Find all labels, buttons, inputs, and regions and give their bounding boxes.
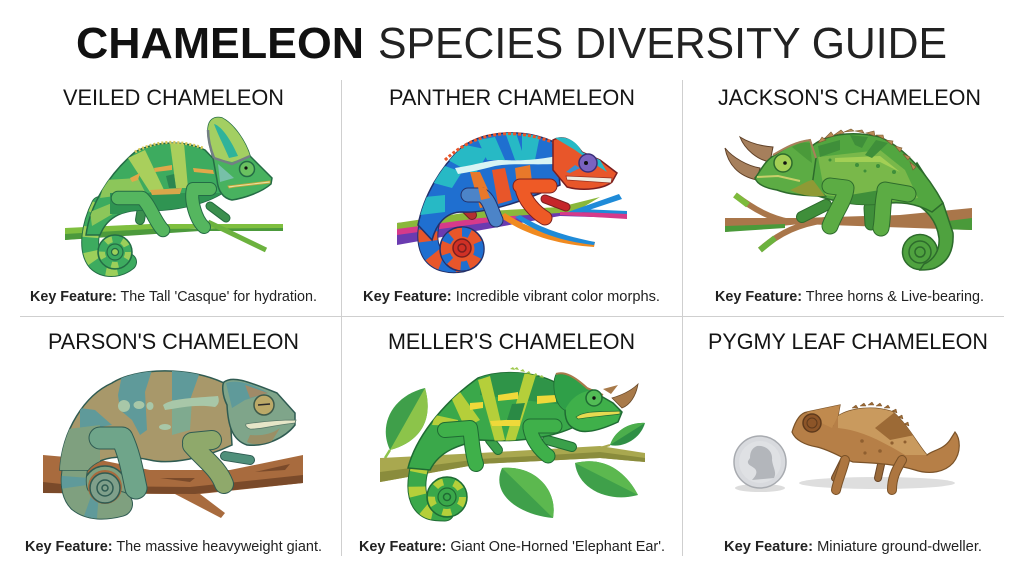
title: SPECIES DIVERSITY GUIDE	[378, 19, 947, 68]
title: CHAMELEON	[76, 19, 364, 68]
leaf: upper left	[385, 388, 428, 458]
caption: veiled: Key Feature: The Tall 'Casque' for hydration.	[30, 289, 317, 305]
leaf: right	[600, 423, 645, 448]
heading: meller's: MELLER'S CHAMELEON	[388, 329, 635, 354]
panel: panther chameleon	[363, 85, 660, 305]
panel: parson's chameleon	[25, 329, 322, 555]
caption: panther: Key Feature: Incredible vibrant color morphs.	[363, 289, 660, 305]
caption: jackson's: Key Feature: Three horns & Live-bearing.	[715, 289, 984, 305]
illustration: parson's chameleon	[43, 368, 303, 518]
heading: veiled: VEILED CHAMELEON	[63, 85, 284, 110]
panel: meller's chameleon	[359, 329, 665, 555]
icon: quarter coin for scale	[734, 436, 786, 492]
heading: panther: PANTHER CHAMELEON	[389, 85, 635, 110]
title	[76, 19, 947, 68]
caption: meller's: Key Feature: Giant One-Horned 'Elephant Ear'.	[359, 539, 665, 555]
caption: parson's: Key Feature: The massive heavyweight giant.	[25, 539, 322, 555]
panel: jackson's chameleon	[715, 85, 984, 305]
panel: veiled chameleon	[30, 85, 317, 305]
illustration: meller's chameleon	[380, 367, 645, 518]
leaf: lower centre	[499, 468, 554, 518]
illustration: veiled chameleon	[65, 118, 283, 269]
caption: pygmy leaf: Key Feature: Miniature ground-dweller.	[724, 539, 982, 555]
leaf: lower right	[575, 461, 638, 497]
heading: jackson's: JACKSON'S CHAMELEON	[718, 85, 981, 110]
heading: parson's: PARSON'S CHAMELEON	[48, 329, 299, 354]
panel: pygmy leaf chameleon	[708, 329, 988, 555]
illustration: panther chameleon	[397, 130, 627, 271]
illustration: jackson's chameleon	[725, 129, 972, 270]
heading: pygmy leaf: PYGMY LEAF CHAMELEON	[708, 329, 988, 354]
illustration: pygmy leaf chameleon	[792, 402, 959, 490]
branch	[380, 446, 645, 482]
